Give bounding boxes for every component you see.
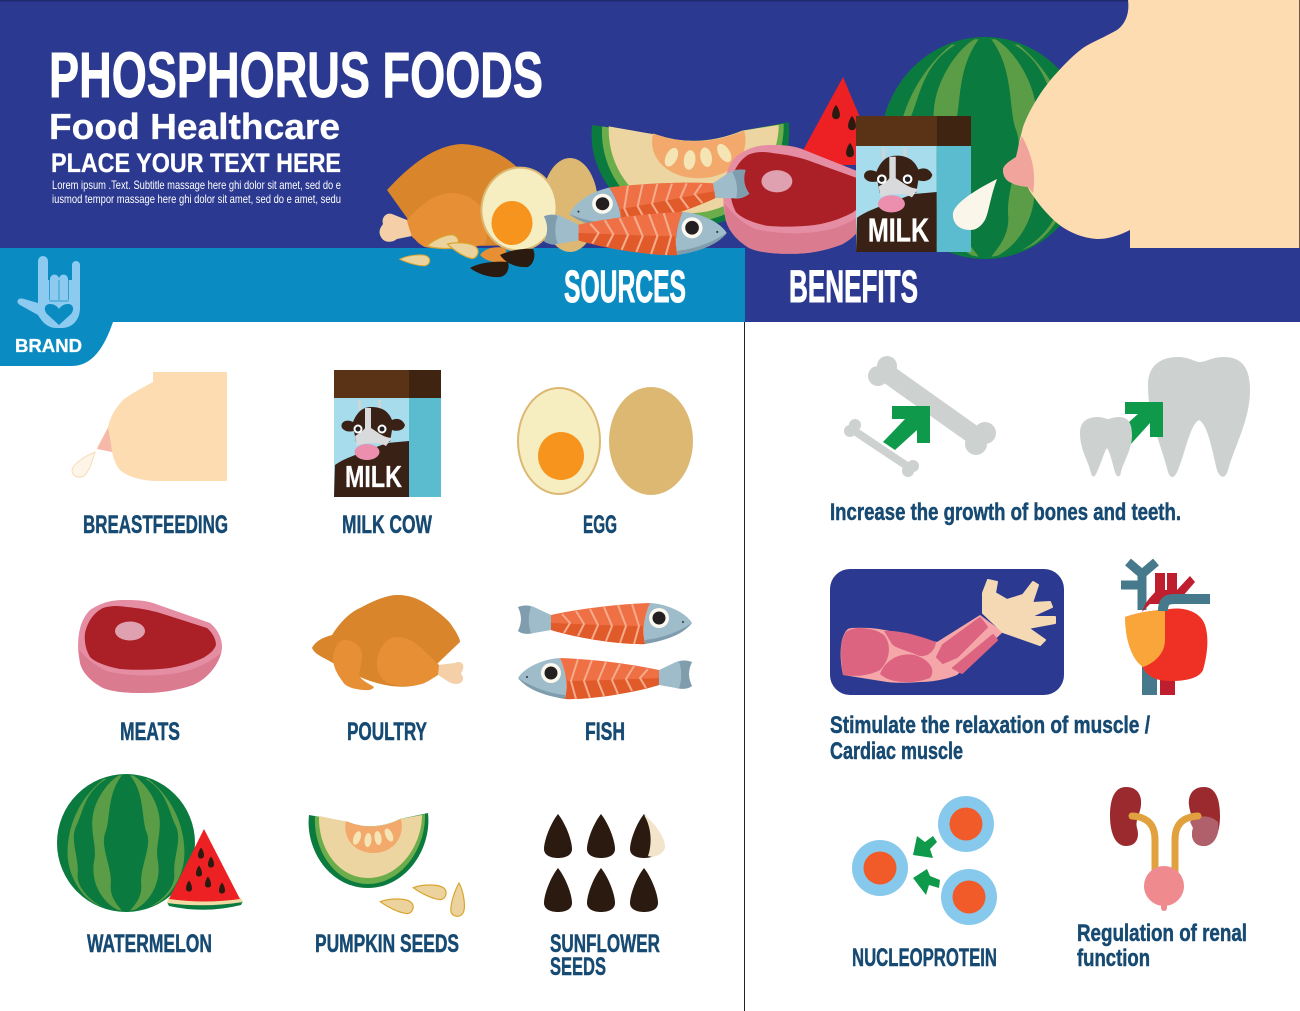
sources heading: SOURCES xyxy=(564,261,686,312)
header milk box: MILK xyxy=(868,212,929,249)
header sunflower seeds xyxy=(470,249,534,277)
header milk box xyxy=(856,116,971,252)
muscle caption xyxy=(830,712,1150,765)
nucleoprotein caption: NUCLEOPROTEIN xyxy=(852,944,997,972)
icon: meat xyxy=(78,600,222,693)
header milk drop xyxy=(953,179,997,230)
header cut egg xyxy=(475,162,563,256)
icon: arm muscle xyxy=(830,569,1064,695)
icon: bones with growth arrow xyxy=(844,356,996,477)
icon: eggs xyxy=(517,387,693,495)
header watermelon xyxy=(880,37,1090,259)
label: PUMPKIN SEEDS xyxy=(315,930,459,958)
intro text xyxy=(52,178,341,206)
header banner xyxy=(0,0,1300,322)
title: PHOSPHORUS FOODS xyxy=(49,39,543,111)
icon: kidneys and bladder xyxy=(1110,787,1220,911)
panel: benefits xyxy=(830,356,1250,972)
label: BREASTFEEDING xyxy=(83,511,228,539)
label: MILK COW xyxy=(342,511,432,539)
renal caption xyxy=(1077,920,1247,972)
header melon xyxy=(592,122,789,227)
label: MEATS xyxy=(120,718,180,746)
icon: teeth with growth arrow xyxy=(1080,357,1250,477)
muscle caption: Cardiac muscle xyxy=(830,738,963,765)
label: SEEDS xyxy=(550,953,606,981)
label: FISH xyxy=(585,718,625,746)
header breast xyxy=(1003,0,1299,248)
header fish upper xyxy=(566,166,751,235)
bones and teeth caption: Increase the growth of bones and teeth. xyxy=(830,499,1181,526)
icon: breastfeeding xyxy=(72,372,227,481)
tagline: PLACE YOUR TEXT HERE xyxy=(51,148,341,178)
header food illustration xyxy=(380,0,1300,277)
icon: milk box: MILK xyxy=(345,459,402,494)
icon: poultry xyxy=(312,595,463,690)
icon: milk box xyxy=(334,370,441,497)
muscle caption: Stimulate the relaxation of muscle / xyxy=(830,712,1150,739)
renal caption: function xyxy=(1077,945,1150,972)
header fish lower xyxy=(544,212,727,255)
brand name: BRAND xyxy=(15,336,82,356)
panel: sources xyxy=(57,370,693,981)
header meat xyxy=(723,145,872,254)
icon: heart xyxy=(1121,562,1210,695)
sources band with brand tab xyxy=(0,248,745,366)
subtitle: Food Healthcare xyxy=(49,106,340,147)
header watermelon slice xyxy=(795,77,880,165)
icon: fish xyxy=(518,603,692,699)
icon: sunflower seeds xyxy=(544,814,665,912)
icon: nucleoprotein cells xyxy=(852,796,997,925)
label: POULTRY xyxy=(347,718,427,746)
header chicken xyxy=(380,144,520,249)
label: EGG xyxy=(583,511,617,539)
benefits heading: BENEFITS xyxy=(789,261,918,312)
panel: divider xyxy=(744,322,745,1011)
intro text: Lorem ipsum .Text. Subtitle massage here ghi dolor sit amet, sed do e xyxy=(52,178,341,192)
header whole egg xyxy=(542,158,598,252)
label: WATERMELON xyxy=(87,930,212,958)
brand logo xyxy=(15,256,82,356)
header pumpkin seeds xyxy=(400,233,510,266)
renal caption: Regulation of renal xyxy=(1077,920,1247,947)
intro text: iusmod tempor massage here ghi dolor sit amet, sed do e amet, sedu xyxy=(52,192,341,206)
icon: pumpkin and seeds xyxy=(309,813,464,916)
icon: rock hand with heart xyxy=(17,256,80,328)
label xyxy=(550,930,660,981)
label: SUNFLOWER xyxy=(550,930,660,958)
icon: watermelon xyxy=(57,774,243,912)
